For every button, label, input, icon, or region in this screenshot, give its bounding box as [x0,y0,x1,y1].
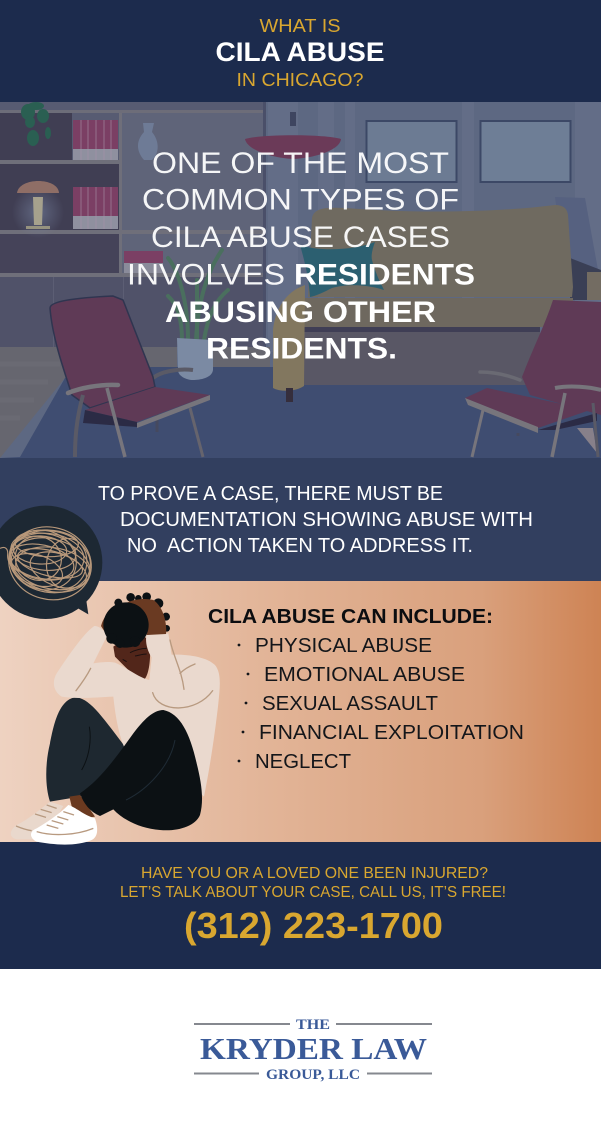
hanging plant [21,102,51,146]
ceiling lamp [245,112,341,159]
shelving unit [0,102,266,347]
ankle [69,795,95,820]
eyes [123,648,147,662]
heading: cila abuse: CILA ABUSE [216,37,384,67]
list heading: CILA ABUSE CAN INCLUDE: [208,606,493,628]
hair back curls [114,592,170,632]
hero text: ABUSING OTHER [165,296,436,329]
panel: call to action [0,842,601,969]
picture frames [366,121,570,182]
heading: what is: WHAT IS [260,16,340,36]
table lamp [16,181,60,230]
panel: proof statement [0,458,601,581]
list items: FINANCIAL EXPLOITATION [259,722,524,744]
curtains [268,102,601,352]
hands [115,599,166,635]
panel: proof statement: TO PROVE A CASE, THERE MUST BE [98,483,443,505]
heading: in chicago: IN CHICAGO? [236,70,364,90]
list items: NEGLECT [255,751,351,773]
panel: abuse list [0,581,601,842]
list items: EMOTIONAL ABUSE [264,664,465,686]
pillow [300,242,384,297]
hero text: COMMON TYPES OF [142,184,459,216]
left chair [50,296,210,457]
panel: proof statement: NO ACTION TAKEN TO ADDRESS IT. [127,535,473,557]
hero text [127,147,475,366]
panel: header [0,0,601,102]
hero text: RESIDENTS [294,258,475,292]
sofa arm [273,285,305,402]
potted plant [168,250,228,380]
list items: SEXUAL ASSAULT [262,693,438,715]
hero text: RESIDENTS. [206,332,397,366]
books [73,120,163,273]
list items: PHYSICAL ABUSE [255,635,432,657]
icon: distressed person [11,592,220,845]
vase [138,123,158,160]
front shoe [31,805,97,845]
panel: call to action: LET’S TALK ABOUT YOUR CASE, CALL US, IT’S FREE! [120,884,506,901]
logo: KRYDER LAW [200,1031,427,1066]
hair [103,602,149,648]
potted plant base [178,367,213,380]
face [113,637,150,680]
logo [194,1017,432,1083]
panel: proof statement: DOCUMENTATION SHOWING ABUSE WITH [120,509,533,531]
cta text: HAVE YOU OR A LOVED ONE BEEN INJURED? [141,865,488,882]
hero text: CILA ABUSE CASES [151,221,450,254]
torso and arms [54,626,220,797]
floor [0,347,601,458]
back shoe [11,802,63,839]
arm creases [76,640,213,708]
logo: THE [296,1017,330,1033]
icon: speech bubble with scribble [0,506,102,619]
hero text: ONE OF THE MOST [152,147,449,180]
panel: living room scene [0,102,601,458]
front leg [80,710,202,830]
right chair [465,300,601,457]
sofa [300,197,601,385]
list items [238,635,524,773]
phone number: (312) 223-1700 [184,905,443,946]
back leg [46,697,125,802]
logo: GROUP, LLC [266,1067,360,1083]
hero text: INVOLVES [127,258,285,292]
